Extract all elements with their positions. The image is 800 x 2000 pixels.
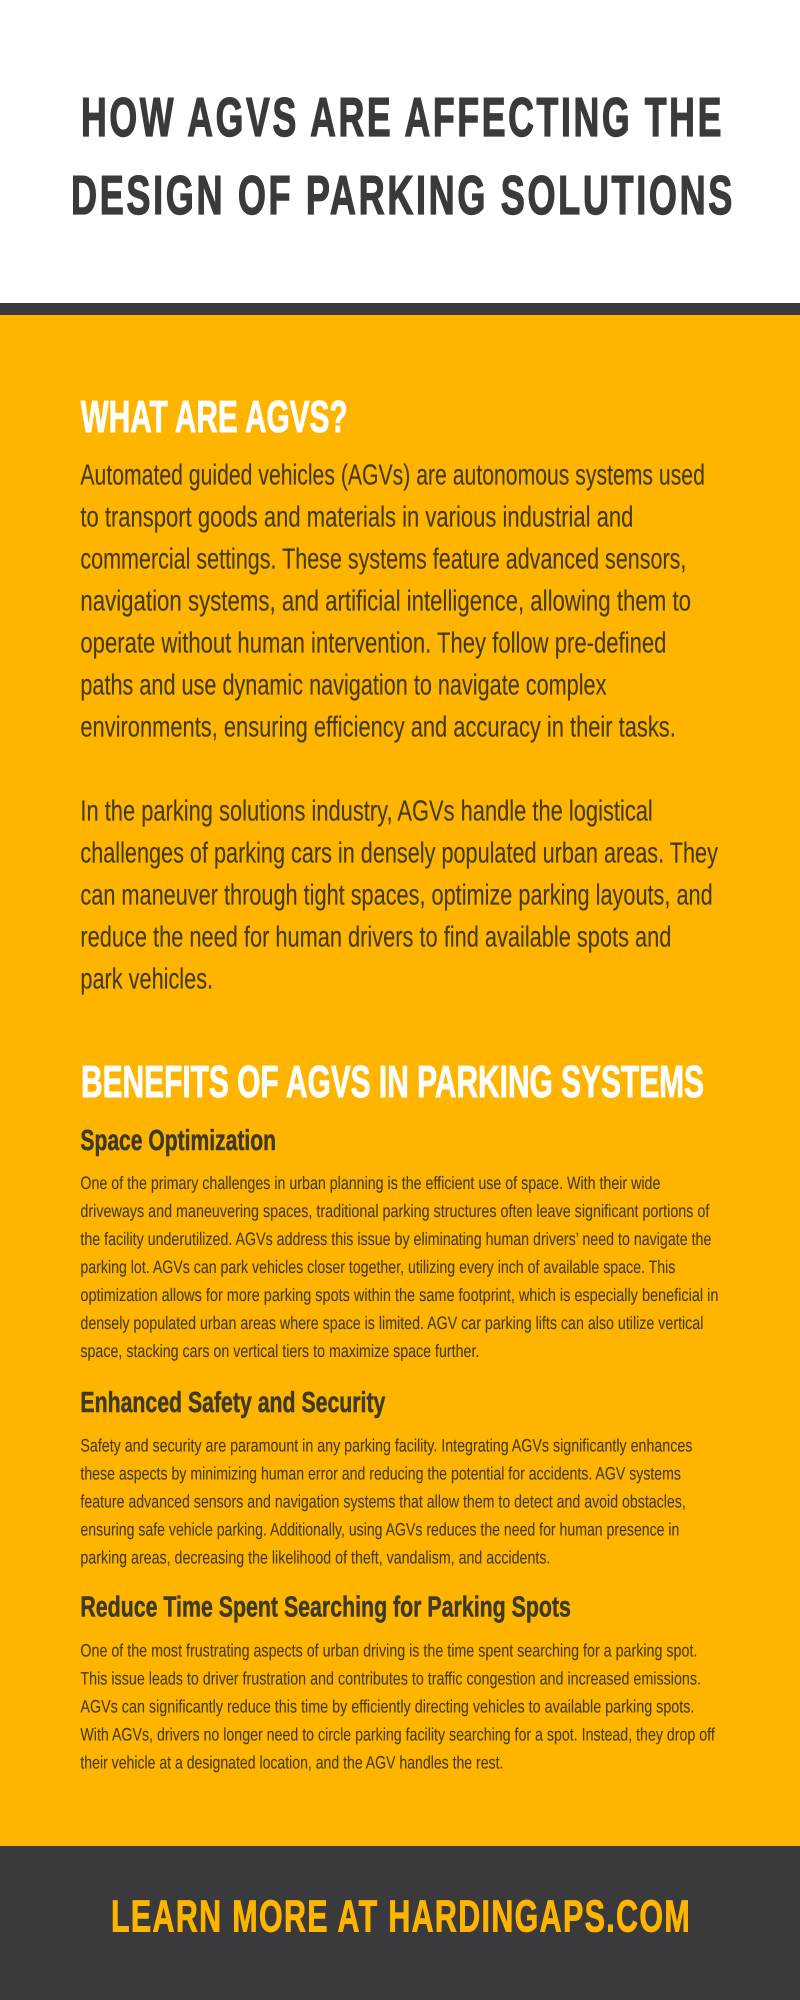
panel: dark footer background xyxy=(0,1846,800,2000)
text block: reduce search time: their vehicle at a designated location, and the AGV handles the rest. xyxy=(80,1753,503,1773)
text block: safety and security xyxy=(80,1436,692,1568)
subheading: enhanced safety and security: Enhanced Safety and Security xyxy=(80,1387,385,1419)
text block: AGVs in the parking industry xyxy=(80,796,718,996)
header divider band xyxy=(0,303,800,315)
text block: AGV definition xyxy=(80,460,705,744)
text block: space optimization: space, stacking cars on vertical tiers to maximize space further. xyxy=(80,1341,479,1361)
text block: safety and security: parking areas, decreasing the likelihood of theft, vandalism, and accidents. xyxy=(80,1548,550,1568)
text block: space optimization: One of the primary challenges in urban planning is the efficient use of space. With their wide xyxy=(80,1173,660,1193)
title xyxy=(71,86,735,226)
text block: reduce search time xyxy=(80,1641,716,1773)
heading: what are AGVs: WHAT ARE AGVS? xyxy=(81,391,348,442)
subheading: space optimization: Space Optimization xyxy=(80,1125,276,1157)
text block: space optimization xyxy=(80,1173,718,1361)
text block: AGV definition: paths and use dynamic navigation to navigate complex xyxy=(80,670,607,702)
subheading: reduce time spent searching: Reduce Time Spent Searching for Parking Spots xyxy=(80,1592,571,1624)
text block: AGV definition: to transport goods and materials in various industrial and xyxy=(80,502,633,534)
panel: white header background xyxy=(0,0,800,303)
panel: yellow content background xyxy=(0,315,800,1846)
text block: AGVs in the parking industry: park vehicles. xyxy=(80,964,213,996)
